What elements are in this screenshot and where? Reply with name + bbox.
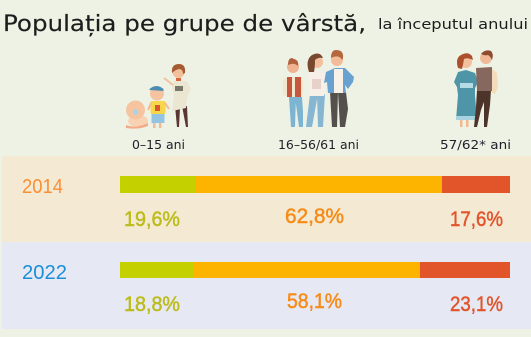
value 19,6%: 19,6% [124, 207, 180, 231]
panel: 2022 [2, 242, 531, 329]
value 58,1%: 58,1% [287, 289, 342, 313]
year 2014: 2014 [22, 176, 63, 198]
icon: children group [126, 64, 191, 129]
icon: adults group [283, 50, 354, 127]
baby [126, 100, 148, 129]
panel: 2014 [2, 156, 531, 242]
label: 16-56/61: 16–56/61 ani [278, 137, 359, 152]
man [324, 50, 354, 127]
title: la începutul anului [378, 17, 528, 33]
title [3, 11, 528, 37]
title: Populația pe grupe de vârstă, [3, 11, 366, 37]
icon: seniors group [454, 50, 498, 127]
value 18,8%: 18,8% [124, 292, 180, 316]
year 2022: 2022 [22, 262, 67, 284]
teen boy [283, 58, 303, 127]
boy [148, 86, 169, 128]
stacked bar 2022 [120, 262, 510, 278]
value 23,1%: 23,1% [450, 292, 503, 316]
senior man [474, 50, 498, 127]
label: 0-15: 0–15 ani [132, 137, 185, 152]
value 62,8%: 62,8% [285, 204, 344, 228]
stacked bar 2014 [120, 176, 510, 193]
senior woman [454, 53, 478, 127]
woman [306, 54, 327, 127]
teen girl [164, 64, 191, 127]
value 17,6%: 17,6% [450, 207, 503, 231]
label: 57/62: 57/62* ani [440, 137, 511, 152]
